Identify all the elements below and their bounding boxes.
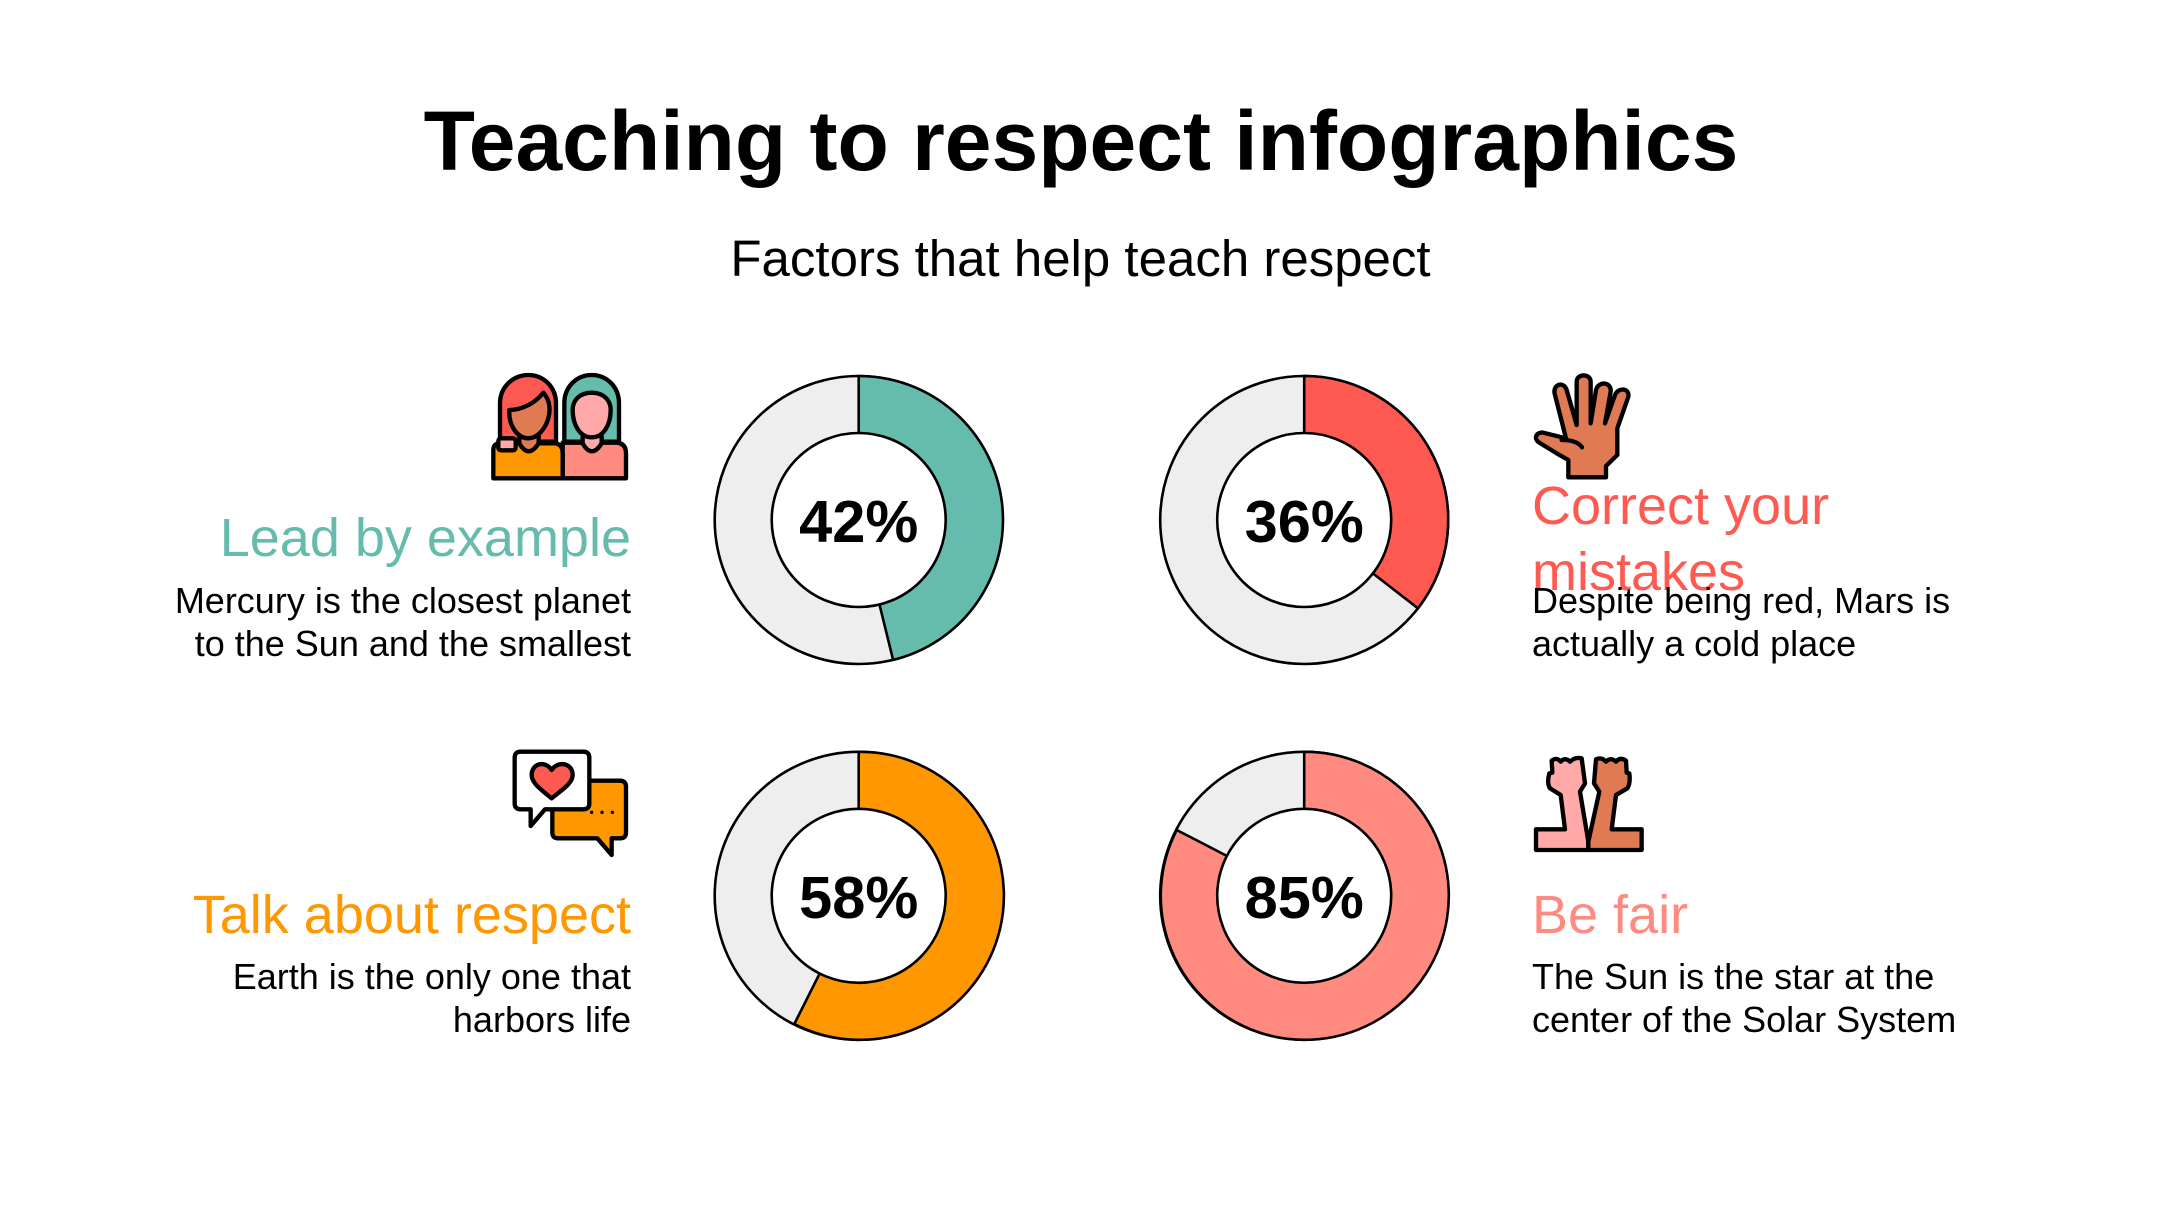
panel: be fair xyxy=(1532,758,1956,1040)
donut chart: 36% xyxy=(1160,376,1448,664)
donut chart: 42%: 42% xyxy=(799,488,918,555)
icon: two women xyxy=(493,375,626,478)
icon: speech bubbles with heart xyxy=(515,752,626,855)
description: The Sun is the star at the xyxy=(1532,956,1934,997)
heading: Lead by example xyxy=(220,508,631,568)
donut chart: 58% xyxy=(715,752,1004,1040)
description: center of the Solar System xyxy=(1532,999,1956,1040)
donut chart: 85%: 85% xyxy=(1245,864,1364,931)
description: Mercury is the closest planet xyxy=(175,580,631,621)
icon: open hand xyxy=(1536,375,1628,477)
description: actually a cold place xyxy=(1532,623,1856,664)
heading: Talk about respect xyxy=(193,885,631,945)
panel: talk about respect xyxy=(193,752,631,1040)
heading: Be fair xyxy=(1532,885,1688,945)
panel: lead by example xyxy=(175,375,631,664)
title: Teaching to respect infographics xyxy=(424,94,1738,188)
icon: raised fists xyxy=(1536,758,1642,850)
subtitle: Factors that help teach respect xyxy=(730,230,1431,287)
description: harbors life xyxy=(453,999,631,1040)
description: to the Sun and the smallest xyxy=(195,623,631,664)
donut chart: 58%: 58% xyxy=(799,864,918,931)
heading: mistakes xyxy=(1532,542,1745,602)
donut chart: 85% xyxy=(1160,752,1449,1040)
description: Earth is the only one that xyxy=(233,956,631,997)
donut chart: 42% xyxy=(715,376,1003,664)
donut chart: 36%: 36% xyxy=(1245,488,1364,555)
panel: correct your mistakes xyxy=(1532,375,1950,664)
heading: Correct your xyxy=(1532,476,1829,536)
description: Despite being red, Mars is xyxy=(1532,580,1950,621)
